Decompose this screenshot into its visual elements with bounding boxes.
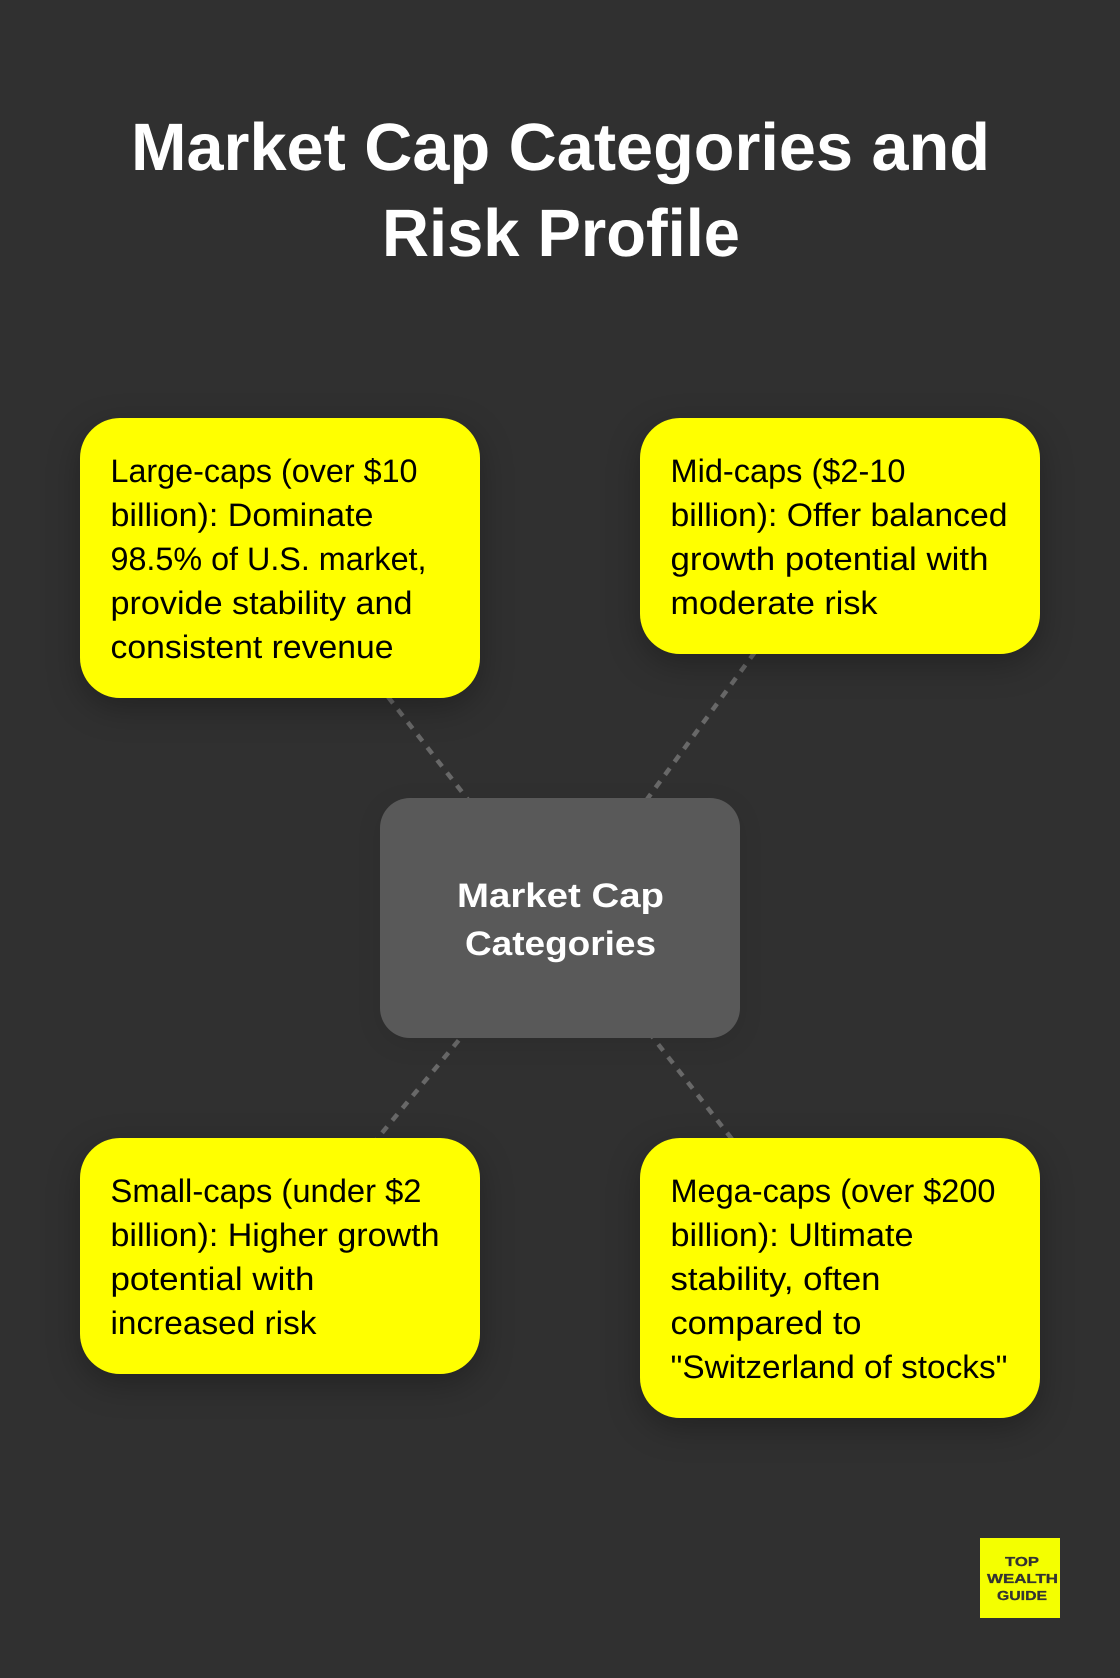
connector: mega-caps to center xyxy=(560,918,840,1278)
connector: large-caps to center xyxy=(280,558,560,918)
panel: center node: Market Cap xyxy=(457,877,664,915)
title: Market Cap Categories and xyxy=(131,110,990,185)
logo: Top Wealth Guide xyxy=(980,1538,1060,1618)
panel: mega-caps: compared to xyxy=(670,1305,862,1341)
title: Risk Profile xyxy=(382,196,740,271)
panel: mega-caps: Mega-caps (over $200 xyxy=(670,1173,996,1209)
panel: mid-caps xyxy=(640,418,1040,654)
panel: large-caps: 98.5% of U.S. market, xyxy=(110,541,426,577)
panel: center node xyxy=(380,798,740,1038)
panel: large-caps: Large-caps (over $10 xyxy=(110,453,418,489)
panel: large-caps: provide stability and xyxy=(110,585,412,621)
connector: small-caps to center xyxy=(280,918,560,1256)
logo: Top Wealth Guide: TOP xyxy=(1005,1554,1039,1569)
panel: large-caps xyxy=(80,418,480,698)
panel: small-caps: billion): Higher growth xyxy=(110,1217,440,1253)
panel: mega-caps: "Switzerland of stocks" xyxy=(670,1349,1008,1385)
logo: Top Wealth Guide: GUIDE xyxy=(997,1588,1047,1603)
panel: mega-caps: stability, often xyxy=(670,1261,880,1297)
connector: mid-caps to center xyxy=(560,536,840,918)
panel: large-caps: consistent revenue xyxy=(110,629,394,665)
panel: mid-caps: Mid-caps ($2-10 xyxy=(670,453,906,489)
panel: mega-caps xyxy=(640,1138,1040,1418)
panel: mid-caps: billion): Offer balanced xyxy=(670,497,1008,533)
panel: small-caps: increased risk xyxy=(110,1305,317,1341)
panel: center node: Categories xyxy=(465,925,656,963)
panel: mega-caps: billion): Ultimate xyxy=(670,1217,914,1253)
panel: small-caps: potential with xyxy=(110,1261,314,1297)
panel: mid-caps: growth potential with xyxy=(670,541,988,577)
panel: small-caps: Small-caps (under $2 xyxy=(110,1173,422,1209)
panel: large-caps: billion): Dominate xyxy=(110,497,374,533)
title xyxy=(131,110,990,271)
logo: Top Wealth Guide: WEALTH xyxy=(987,1571,1058,1586)
panel: small-caps xyxy=(80,1138,480,1374)
panel: mid-caps: moderate risk xyxy=(670,585,878,621)
